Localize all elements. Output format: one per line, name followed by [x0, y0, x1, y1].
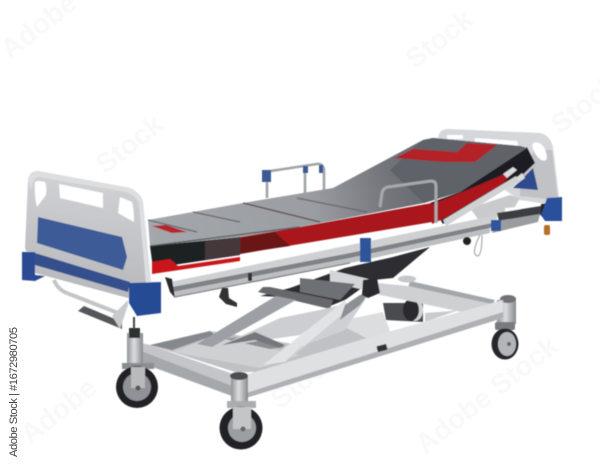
blue strip	[35, 253, 130, 292]
watermarks: Stock	[90, 108, 169, 180]
mattress side: far section	[150, 147, 535, 274]
base frame beams	[128, 300, 503, 398]
red cross mark	[395, 143, 497, 162]
small red tag	[152, 225, 187, 233]
foot board	[22, 171, 161, 316]
near handrail	[380, 181, 436, 223]
head board	[438, 129, 559, 222]
far section silver brace	[443, 176, 519, 226]
bed illustration	[22, 129, 562, 450]
near corner caster	[220, 372, 262, 450]
blue corner block left	[22, 252, 45, 281]
foot pedal assembly	[54, 280, 128, 329]
far side beams	[376, 276, 495, 312]
stock image credit: Adobe Stock | #1672980705	[8, 327, 20, 457]
side rails	[165, 203, 550, 298]
blue panel	[37, 217, 127, 270]
watermarks: Stock	[400, 3, 479, 75]
near left caster	[116, 317, 158, 408]
watermarks: Stock	[265, 343, 344, 415]
far caster	[492, 295, 518, 360]
far handrail	[262, 164, 324, 198]
orange latch	[544, 225, 550, 235]
blue corner block right	[129, 282, 161, 316]
watermarks: Adobe	[15, 372, 102, 450]
scissor lift arms	[197, 247, 430, 365]
mattress top	[148, 138, 527, 246]
board openings	[35, 181, 46, 207]
base frame floor	[150, 299, 470, 372]
head corner block	[541, 197, 562, 221]
watermarks: Adobe Stock	[410, 330, 564, 460]
